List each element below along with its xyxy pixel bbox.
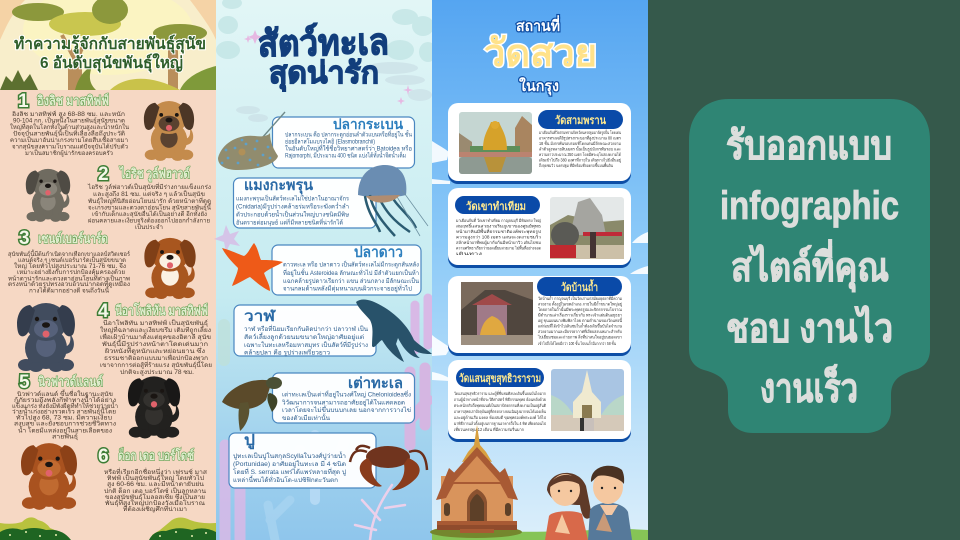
breed 1: อิงลิช มาสทิฟฟ์: [37, 93, 109, 108]
breed 4: ปกติจะสูงประมาณ 78 ซม.: [120, 369, 194, 376]
card: Wat Khao: วัดเขาทำเทียม: [466, 200, 526, 213]
breed 4: [98, 301, 212, 376]
description: เที่ยวนครปฐม 12 เดือน ที่มีความร่มรื่นมาก: [454, 426, 524, 432]
card: stingray: Rajomorphi, มีประมาณ 400 ชนิด แบ่งได้ทั้งน้ำจืดน้ำเค็ม: [285, 150, 406, 160]
breed 1: มาเป็นสมาชิกผู้น่ารักของครอบครัว: [25, 148, 113, 157]
panel: dog breeds infographic: [0, 0, 216, 540]
card: Wat Saen Suk: วัดแสนสุขสุทธิวราราม: [459, 372, 541, 386]
card: whale: [234, 305, 376, 356]
card: whale: วาฬ หรือที่นิยมเรียกกันติดปากว่า ปลาวาฬ เป็น: [244, 324, 369, 333]
card: starfish: แฉกคล้ายรูปดาวเรียกว่า แขน ส่วนกลาง มีลักษณะเป็น: [283, 276, 420, 285]
card: Wat Sam Phran: [448, 103, 631, 184]
title: 6 อันดับสุนัขพันธุ์ใหญ่: [40, 53, 183, 73]
pill heading: [455, 196, 540, 214]
icon: Saint Bernard: [144, 238, 196, 299]
breed 1: 1: [18, 91, 29, 112]
card: turtle: [272, 373, 414, 423]
title: ในกรุง: [519, 77, 559, 96]
illustration: pale jellyfish and coral backdrop: [214, 0, 437, 540]
description: มาเยือนกันที่วัดสามพรานจังหวัดนครปฐมมาลัยรูปปั้น โดดเด่น: [539, 129, 621, 136]
breed 1: จากสุนัขสงครามโบราณแต่ปัจจุบันได้ปรับตัว: [12, 142, 128, 150]
breed 2: และสูงถึง 81 ซม. แต่จริง ๆ แล้วเป็นสุนัข: [93, 189, 205, 198]
title: [258, 21, 389, 92]
breed 4: นีอาโพลิทัน มาสทิฟฟ์: [115, 302, 208, 318]
breed 3: แลนด์จริง ๆ เซนต์เบอร์นาร์ดเป็นสุนัขขนาด: [18, 255, 126, 264]
description: ตระหนักจริงถึงพุทธมนต์เป็นสถาปัตยกรรมที่งดงามเป็นอยู่สันติ: [454, 402, 546, 409]
breed 5: ทั่วไปสูง 68, 73 ซม. มีความเงียบ: [16, 414, 112, 422]
illustration: forest header: [0, 0, 216, 90]
breed 1: ปัจจุบันสายพันธุ์นี้เป็นที่เลื่องลือถึงประวัติ: [13, 128, 125, 138]
card: Wat Sam Phran: วัดสามพราน: [555, 114, 606, 127]
breed 2: พันธุ์ใหญ่ที่นิสัยอ่อนโยนน่ารัก ด้วยหน้าตาที่ดูดุ: [88, 197, 211, 205]
description: 18 ชั้น มังกรพันรอบรอบที่โดดเด่นมีลักษณะสวยงาม: [539, 140, 621, 146]
breed 4: เขาจากการต่อสู้ที่ร้ายแรง สุนัขพันธุ์นี้โดย: [100, 359, 212, 369]
icon: turtle: [222, 377, 282, 431]
description: เดินเข้าไปถึง 380 องศาที่ภายใน เดินทางไปยังอื่นอยู่: [539, 156, 621, 164]
photo: golden Buddha: [459, 112, 532, 174]
title: สุดน่ารัก: [269, 57, 379, 92]
panel: promo message: [648, 0, 960, 540]
card: starfish: ปลาดาว: [354, 244, 403, 261]
card: starfish: ดาวทะเล หรือ ปลาดาว เป็นสัตว์ทะเลไม่มีกระดูกสันหลัง: [283, 260, 419, 268]
card: whale: สัตว์เลี้ยงลูกด้วยนมขนาดใหญ่อาศัยอยู่แต่: [244, 332, 364, 341]
breed 2: ไอริช วูล์ฟฮาวด์: [118, 165, 190, 182]
breed 4: นีอาโพลิทัน มาสทิฟฟ์ เป็นสุนัขพันธุ์: [103, 318, 208, 327]
breed 6: พันธุ์ที่สูงใหญ่ปกป้องวังเมื่อโบราณ: [105, 499, 205, 507]
card: Wat Ban Tham: [448, 276, 631, 356]
breed 5: 5: [19, 372, 30, 393]
card: crab: (Portunidae) อาศัยอยู่ในทะเล มี 4 ชนิด: [233, 460, 346, 468]
description: ความศรัทธาเรียกว่ายอดเยี่ยมสวยงาม ไม่พื้นที่อย่างจอด: [456, 244, 541, 250]
card: starfish: [272, 244, 421, 295]
card: starfish: จานกลมด้านหลังมีตุ่มหนามบนผิวกระจายอยู่ทั่วไป: [283, 284, 412, 292]
breed 4: 4: [98, 301, 109, 322]
breed 5: สงบสุข และยังชอบการช่วยชีวิตทาง: [14, 420, 116, 428]
breed 5: สายพันธุ์: [52, 432, 78, 440]
photo: white pagoda: [551, 369, 624, 431]
card: jellyfish: อันตรายต่อมนุษย์ แต่ก็มีหลายชนิดที่น่ารักได้: [236, 218, 343, 226]
breed 3: 3: [19, 228, 30, 249]
description: ถึงจุดชมวิว นครปฐม ที่มีพร้อมที่จอดรถขึ้นบนพื้นดิน: [539, 162, 613, 169]
icon: Irish Wolfhound: [26, 169, 70, 222]
breed 3: เซนต์เบอร์นาร์ด: [38, 231, 108, 246]
card: turtle: ของตัวเมียเท่านั้น: [282, 413, 331, 422]
breed 4: ผิวหนังที่ดูหนักและหย่อนยาน ซึ่ง: [104, 347, 205, 355]
breed 2: ผ่อนคลายและเงียบจริงต้องออกไปออกกำลังกาย: [88, 216, 210, 224]
card: Wat Khao: [448, 188, 631, 268]
breed 1: 90-104 กก. เป็นหนึ่งในสายพันธุ์สุนัขขนาด: [13, 116, 125, 124]
breed 6: ที่ต้องเผชิญศึกที่น่าเมา: [123, 505, 187, 513]
pill heading: [538, 110, 623, 129]
panel: beautiful temples infographic: [430, 0, 648, 540]
breed 3: หน้าตาน่ารักและดวงตาอ่อนโยนที่ต่างเป็นภาพ: [8, 274, 130, 282]
description: ถามผู้นำทางหน้าที่ประวัติศาสตร์ พิธีกรรมพุทธ ย้อนหลังด้วย: [454, 396, 546, 403]
title: วัดสวย: [484, 33, 597, 75]
promo text: สไตล์ที่คุณ: [731, 239, 889, 293]
title: สถานที่: [516, 15, 560, 35]
card: Wat Saen Suk: [448, 360, 631, 442]
title: [14, 34, 206, 73]
description: วัดบ้านถ้ำ กาญจนบุรี เป็นวัดเก่าแก่สมัยอยุธยาที่มีความ: [538, 295, 622, 302]
card: whale: คล้ายปลา คือ รูปร่างเพรียวยาว: [244, 348, 330, 356]
breed 3: กางได้ดีมากอย่างดี จนถึงวันนี้: [29, 284, 110, 294]
icon: jellyfish: [358, 165, 428, 236]
card: stingray: ปลากระเบน คือ ปลากระดูกอ่อนลำตัวแบนหรือที่อยู่ใน ชั้น: [285, 130, 413, 138]
photo: cave shrine: [461, 282, 533, 345]
breed 1: ใหญ่ที่สุดในโลกทั้งในด้านส่วนสูงและน้ำหนักใน: [10, 121, 129, 131]
breed 1: [10, 91, 129, 157]
card: Wat Ban Tham: วัดบ้านถ้ำ: [561, 279, 598, 294]
promo text: [720, 124, 899, 411]
description: ความสูงกว่า 108 เมตร แสนจะงดงามชมวิว: [456, 234, 542, 240]
breed 2: จะเกรงขามและดวงตาอ่อนโยน สุนัขสายพันธุ์นี้: [88, 202, 212, 212]
breed 5: น้ำ โดยมีแหล่งอยู่ในสายเลือดของ: [18, 424, 112, 434]
icon: starfish: [222, 243, 283, 291]
card: crab: โดยที่ S. serrata แพร่ได้แพร่หลายที่สุด ปู: [233, 468, 346, 476]
description: มาพิธีการแล้วตั้งอยู่บนรากฐานอาคารถึงใน 4 ทิศ เพียงตอนไป: [454, 420, 546, 427]
description: มีตำนานเล่าเรื่องราวเกี่ยวกับ พระเจ้าแผ่นดินอยุธยา: [538, 312, 622, 318]
promo text: infographic: [720, 184, 899, 228]
icon: stingray: [218, 112, 285, 170]
description: อาคารทรงเจดีย์รูปทรงกระบอกที่สูงประมาณ 80 เมตร: [539, 134, 622, 142]
card: jellyfish: ตัวประกอบด้วยน้ำเป็นส่วนใหญ่บางชนิดมีพิษ: [236, 210, 349, 218]
breed 6: [98, 446, 207, 513]
description: โดยภายในถ้ำนั้นมีพระพุทธรูปและจิตรกรรมโบราณ: [538, 306, 622, 313]
description: [539, 129, 622, 169]
breed 5: แข็งแกร่ง ทั้งยังมีพังผืดที่ทำให้ช่วยว่ายน้ำ: [12, 400, 118, 410]
breed 5: กู้ภัยรวมถึงพลังกีฬาทางน้ำได้อย่าง: [14, 394, 116, 404]
breed 3: ตรงหน้าด้วยรูปทรงอวบอ้วนน่ากอดที่ดูเหมือง: [8, 280, 130, 288]
description: สลักหน้าผาที่พบผู้มากับกันมีหน้าผาวิว เดินไปชม: [456, 239, 541, 246]
description: แต่ก่อนที่ได้เข้าไปเดินชมในถ้ำต้องเดินขึ้นบันไดจำนวน: [538, 322, 622, 328]
breed 3: เหมาะอย่างยิ่งกับการปกป้องคุ้มครองด้วย: [17, 268, 125, 276]
breed 2: เป็นประจำ: [135, 222, 163, 231]
description: วัดแสนสุขสุทธิวราราม และผู้ที่ชื่นชมศิลปะเดินขึ้นบนบันไดมาก: [454, 390, 546, 397]
icon: English Mastiff: [144, 101, 194, 161]
description: และอยู่ด้านเรือ มงคล ห้องสมดี ขุมพุทธองค์พระองค์ ได้ไป: [454, 414, 546, 421]
card: turtle: วิวัฒนาการจนสามารถอาศัยอยู่ได้ในแสตลอด: [281, 398, 405, 406]
card: stingray: ในอันดับใหญ่ที่ใช้ชื่อวิทยาศาสตร์ว่า Batoidea หรือ: [285, 144, 412, 152]
breed 2: เข้ากับเด็กและสุนัขอื่นได้เป็นอย่างดี อีกทั้งยัง: [92, 208, 207, 218]
card: crab: ปู: [244, 432, 255, 450]
description: สมฤทธิ์แสนสวยงามริมภูเขาของศูนย์พุทธ: [456, 222, 541, 230]
description: สวยงาม ตั้งอยู่ในเขตอำเภอ ภายในมีถ้ำขนาดใหญ่อยู่: [538, 300, 622, 308]
icon: whale: [356, 299, 432, 362]
card: jellyfish: แมงกะพรุนเป็นสัตว์ทะเลไม่ใช่ปลาในอาณาจักร: [236, 194, 350, 202]
description: เดินทาง: [456, 251, 482, 256]
breed 1: ความเป็นมาอันน่าเกรงขามโดยสืบเชื้อสายมา: [10, 134, 128, 144]
promo text: ชอบ งานไว: [726, 305, 893, 351]
description: ความยาวประมาณ 350 เมตร โดยมีพระอุโบสถงดงามได้: [539, 151, 621, 158]
title: สัตว์ทะเล: [258, 21, 389, 64]
description: อยู่ ขุนแผนนางพิมพิลาไลย ตามตำนานของวัดแห่งนี้: [538, 317, 623, 324]
breed 4: เพื่อเฝ้าบ้านมาตั้งแต่ยุคของอิตาลี สุนัข: [100, 331, 211, 341]
icon: crab: [350, 446, 427, 490]
illustration: Thai temple: [430, 425, 522, 538]
breed 6: ทิฟฟ์ เป็นสุนัขพันธุ์ใหญ่ โดยทั่วไป: [107, 473, 204, 482]
breed 6: ด็อก เดอ บอร์โดซ์: [118, 446, 194, 463]
breed 5: [12, 372, 118, 440]
promo text: งานเร็ว: [760, 363, 858, 411]
illustration: clouds: [432, 141, 648, 381]
description: หน้าผาหินมีพื้นที่ธรรมชาติองค์พระพุทธรูป: [456, 228, 541, 235]
breed 4: ธรรมชาติออกแบบมาเพื่อปกป้องพวก: [104, 354, 208, 362]
promo text: รับออกแบบ: [726, 124, 892, 168]
breed 5: นิวฟาวด์แลนด์: [38, 374, 103, 389]
breed 1: อิงลิช มาสทิฟฟ์ สูง 68-88 ซม. และหนัก: [12, 110, 125, 118]
card: whale: วาฬ: [244, 308, 276, 325]
breed 6: ของสุนัขพันธุ์โมลอสเซีย ซึ่งเป็นสาย: [105, 492, 205, 501]
breed 2: ไอริช วูล์ฟฮาวด์เป็นสุนัขที่มีร่างกายแข็งแกร่ง: [87, 182, 211, 191]
card: turtle: เต่าทะเลเป็นเต่าที่อยู่ในวงศ์ใหญ่ Chelonioideaซึ่ง: [282, 390, 411, 398]
breed 3: สุนัขพันธุ์นี้มีต้นกำเนิดจากเทือกเขาแอลป์สวิตเซอร์: [8, 248, 131, 258]
panel: sea animals infographic: [214, 0, 437, 540]
breed 5: นิวฟาวด์แลนด์ ขึ้นชื่อในฐานะสุนัข: [17, 388, 113, 398]
photo: stone Buddha: [550, 197, 624, 259]
card: jellyfish: แมงกะพรุน: [244, 177, 314, 195]
breed 6: หรือที่เรียกอีกชื่อหนึ่งว่า เฟรนช์ มาส: [104, 468, 207, 476]
description: [454, 390, 546, 432]
breed 6: 6: [98, 446, 109, 467]
description: สวยงามมากและมีบรรยากาศที่เงียบสงบเหมาะสำหรับ: [538, 328, 622, 334]
description: อาคารสุทธเสาปัจจุบันอยู่ที่ตรงกลางบนเนินสูงมากจนได้มองเห็น: [454, 408, 546, 415]
pill heading: [537, 277, 622, 296]
card: whale: เฉพาะในทะเลหรือมหาสมุทร เป็นสัตว์ที่มีรูปร่าง: [244, 340, 368, 349]
illustration: woman greeting: [545, 473, 592, 540]
breed 4: พันธุ์นี้มีรูปร่างหน้าตาโดดเด่นมาก: [102, 338, 208, 348]
card: starfish: ที่อยู่ในชั้น Asteroidea ลักษณะทั่วไป มีลำตัวแยกเป็นห้า: [283, 268, 419, 277]
breed 3: ใหญ่ โดยทั่วไปสูงประมาณ 71-76 ซม. จึง: [14, 262, 126, 270]
icon: Neapolitan Mastiff: [17, 303, 75, 372]
card: crab: ปูทะเลเป็นปูในสกุลScyllaในวงศ์ปูว่ายน้ำ: [233, 451, 346, 460]
breed 4: ใหญ่ที่ฉลาดและเงียบขรึม เดิมทีถูกเลี้ยง: [100, 324, 211, 334]
card: stingray: [272, 116, 414, 168]
card: turtle: เวลาโดยจะไม่ขึ้นบนบกเลย นอกจากการวางไข่: [282, 405, 411, 414]
breed 6: ปกติ ด็อก เดอ บอร์โดซ์ เป็นลูกหลาน: [104, 486, 206, 495]
card: crab: แหล่านี้พบได้ทั่วอินโด-แปซิฟิกตะวันตก: [233, 475, 338, 484]
breed 2: 2: [98, 164, 109, 185]
description: ลำตัวสูงหลายสิบเมตร นั้นเป็นรูปมังกรพันรอบ และ: [539, 146, 621, 152]
card: stingray: ปลากระเบน: [333, 116, 403, 132]
pill heading: [456, 368, 544, 387]
title: [484, 15, 597, 96]
card: jellyfish: (Cnidaria)มีรูปร่างคล้ายร่มหรือระฆังคว่ำลำ: [236, 202, 349, 210]
breed 3: [8, 228, 131, 294]
description: [537, 295, 623, 346]
icon: Newfoundland: [128, 376, 180, 438]
description: ไปเยี่ยมชมและถ่ายภาพ สิ่งที่น่าสนใจอยู่บนยอดเขา: [537, 334, 622, 340]
card: crab: [229, 432, 376, 488]
title: ทำความรู้จักกับสายพันธุ์สุนัข: [14, 34, 206, 55]
breed 6: สูง 60-66 ซม. และมีหน้าตายับย่น: [107, 480, 204, 488]
breed 2: [87, 164, 212, 231]
description: มาเยือนกันที่ วัดเขาทำเทียม กาญจนบุรี มีหินทรง ใหญ่: [456, 217, 541, 224]
illustration: man greeting: [588, 466, 632, 540]
badge shape: [689, 99, 930, 433]
description: [456, 217, 542, 256]
illustration: grass: [432, 528, 648, 540]
card: turtle: เต่าทะเล: [348, 375, 403, 392]
card: jellyfish: [234, 177, 376, 228]
breed 5: ว่ายน้ำเก่งอย่างรวดเร็ว สายพันธุ์นี้โดย: [12, 406, 116, 416]
illustration: bushes: [0, 517, 216, 540]
icon: Dogue de Bordeaux: [21, 443, 77, 510]
card: stingray: ย่อยอีลาสโมแบรงไคอิ (Elasmobranchii): [285, 138, 375, 146]
description: เข้าไปถึงได้โดยมีกว่า 100 ขั้น ไปบนถ้ำมีมากกว่า 58 ชั้น: [538, 340, 616, 346]
